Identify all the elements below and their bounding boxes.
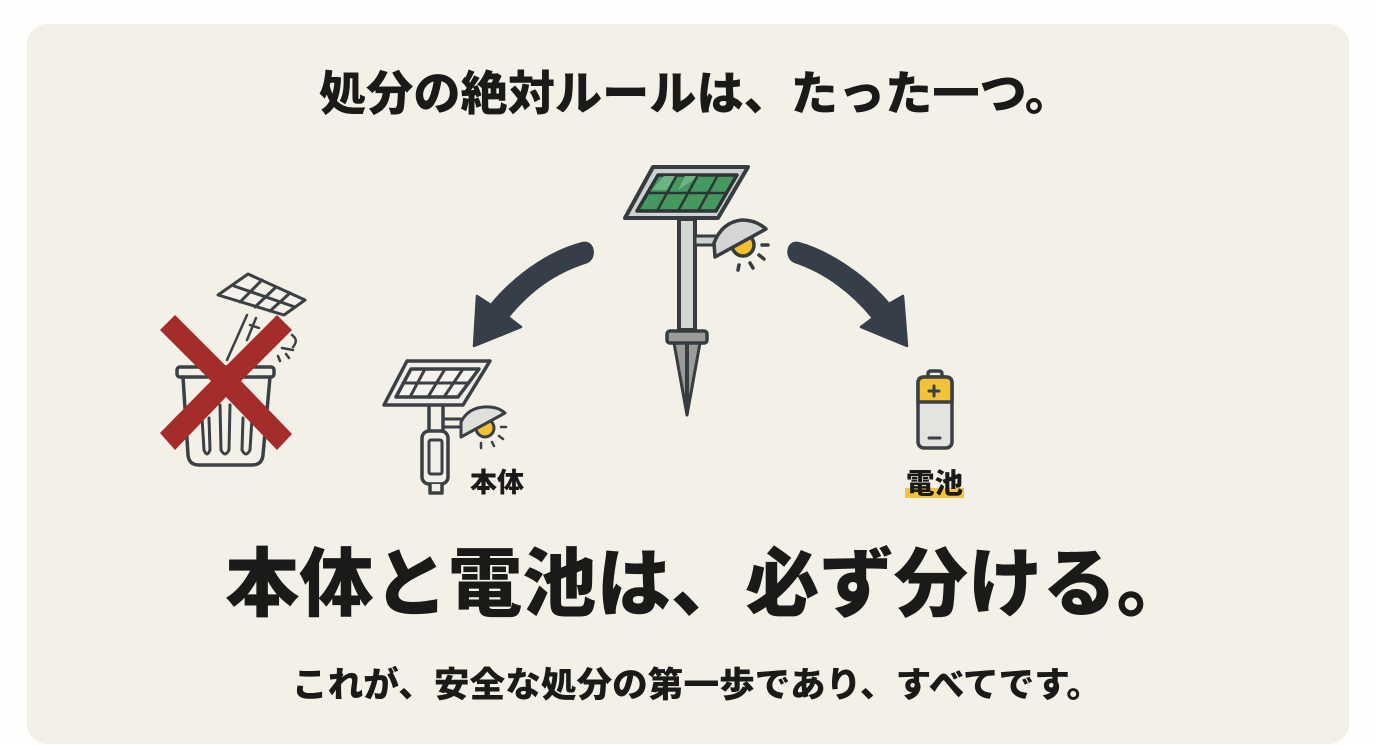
body bulb bbox=[476, 419, 494, 437]
body light rays bbox=[481, 427, 506, 448]
minus bbox=[929, 436, 940, 440]
body arm bbox=[444, 419, 461, 427]
battery terminal bbox=[928, 371, 942, 377]
body lamp head bbox=[461, 407, 505, 437]
main message: 本体と電池は、必ず分ける。 bbox=[225, 542, 1191, 626]
plus bbox=[929, 386, 939, 396]
lamp bulb bbox=[732, 234, 754, 256]
battery top bbox=[918, 377, 952, 402]
discarded solar panel bbox=[218, 274, 305, 360]
body panel frame bbox=[384, 361, 490, 405]
spike bbox=[674, 343, 700, 415]
label highlight bbox=[905, 488, 964, 498]
discarded lamp rays bbox=[278, 335, 296, 361]
icon: battery bbox=[918, 371, 952, 448]
label: body: 本体 bbox=[470, 468, 524, 498]
icon: solar street light bbox=[625, 167, 768, 415]
arrow: right bbox=[789, 243, 907, 346]
pole bbox=[679, 219, 695, 330]
subtext: これが、安全な処分の第一歩であり、すべてです。 bbox=[292, 665, 1102, 705]
lamp head bbox=[714, 220, 766, 257]
cross mark bbox=[160, 315, 292, 450]
body pole bbox=[429, 406, 443, 430]
solar cells bbox=[637, 175, 737, 211]
battery housing bbox=[422, 431, 448, 493]
battery body bbox=[918, 377, 952, 448]
label: battery: 電池 bbox=[906, 468, 963, 499]
trash can bbox=[177, 367, 274, 465]
collar bbox=[667, 331, 707, 343]
title: 処分の絶対ルールは、たった一つ。 bbox=[319, 67, 1072, 120]
solar panel frame bbox=[625, 167, 748, 218]
light rays bbox=[738, 245, 768, 270]
icon: solar light in trash crossed out bbox=[177, 274, 305, 465]
lamp arm bbox=[695, 236, 717, 245]
arrow: left bbox=[474, 243, 593, 346]
icon: lamp body without battery bbox=[384, 361, 506, 493]
